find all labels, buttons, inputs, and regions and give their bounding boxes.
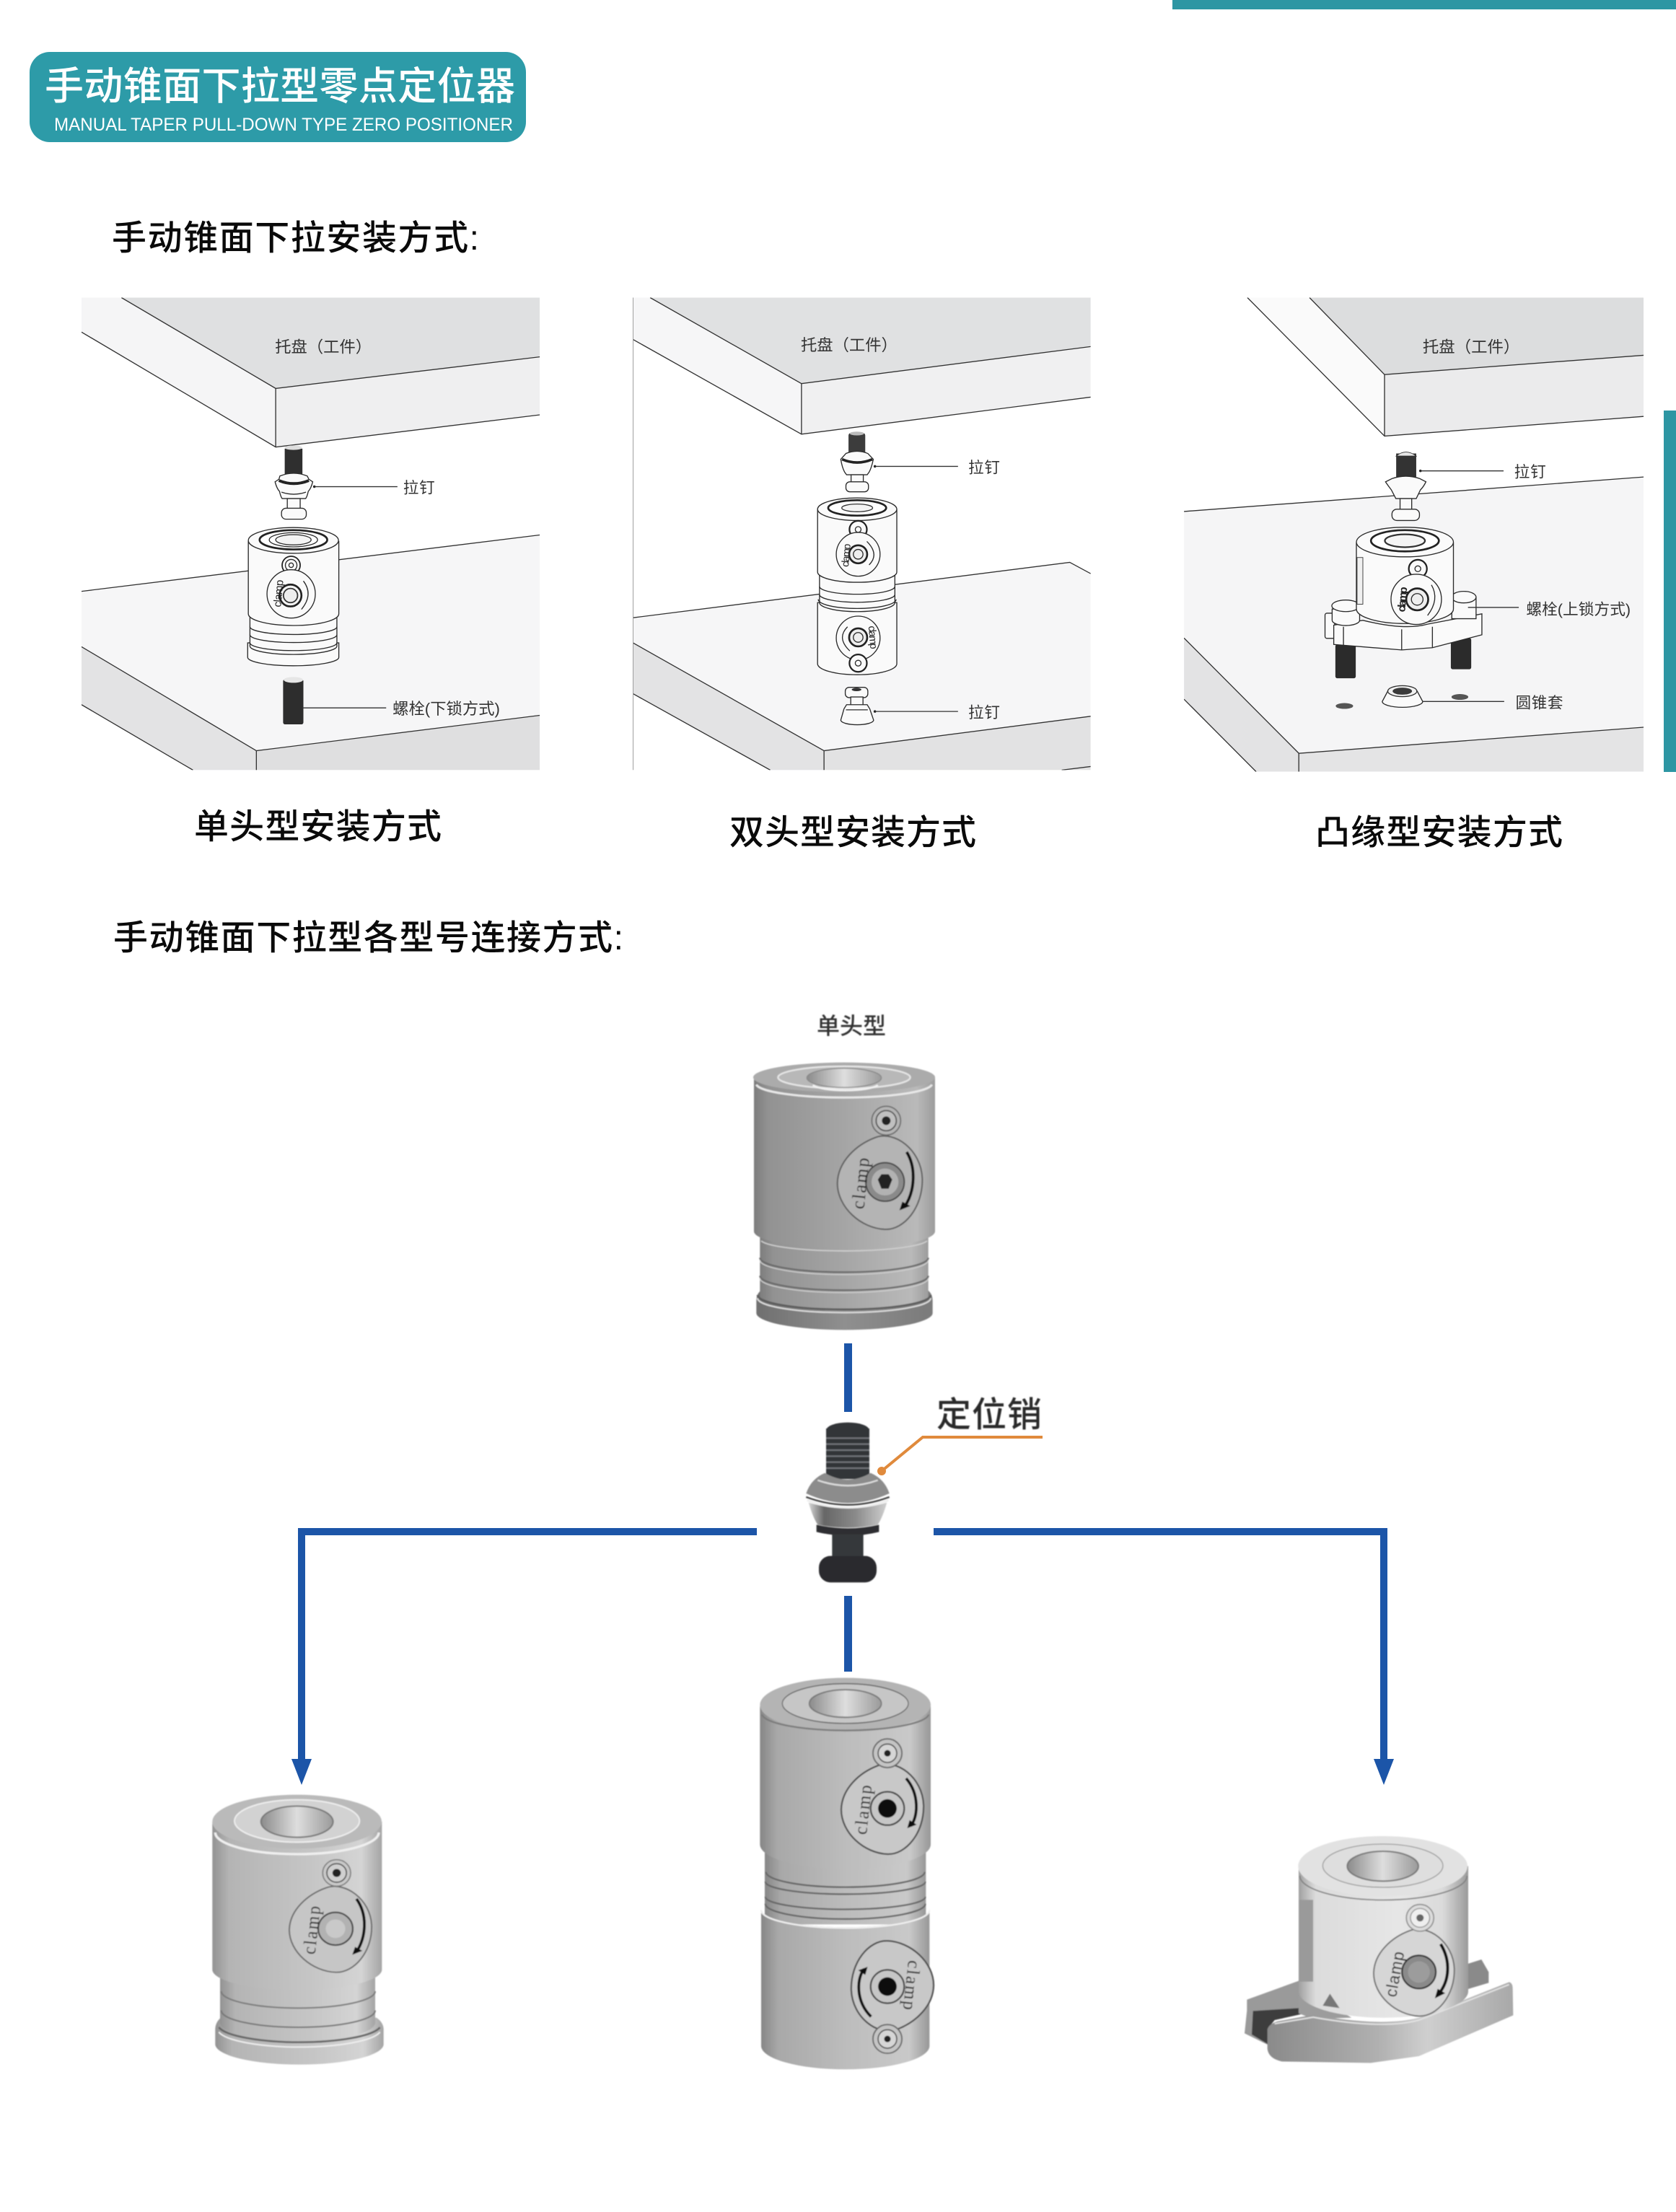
- lower clamp cam: [851, 1941, 934, 2053]
- pallet label: 托盘（工件）: [275, 338, 372, 356]
- lower base slab: [633, 562, 1091, 770]
- bottom pull stud: [841, 688, 874, 725]
- clamp cam: [1374, 1905, 1455, 2016]
- clamp cam: [838, 1106, 922, 1229]
- right edge accent bar: [1664, 411, 1676, 772]
- clamp cam: clamp: [299, 1905, 325, 1955]
- top accent bar: [1172, 0, 1676, 9]
- upper clamp cam: [841, 1739, 923, 1854]
- heading: installation methods: 手动锥面下拉安装方式:: [112, 219, 479, 258]
- taper sleeve: [1382, 685, 1423, 707]
- clamp cam: clamp: [1382, 1950, 1408, 1998]
- connector: blue line from locating pin to double head: [844, 1596, 852, 1672]
- top pull stud: [841, 431, 873, 492]
- photo: flange type positioner: [1245, 1836, 1513, 2063]
- leader: bottom pull stud: [874, 710, 958, 713]
- bolt label: 螺栓(上锁方式): [1526, 601, 1631, 618]
- leader: bolt: [1468, 606, 1519, 608]
- line-art flange positioner: clamp: [1395, 587, 1410, 613]
- upper pallet slab: [1247, 297, 1644, 436]
- caption: flange type: 凸缘型安装方式: [1315, 814, 1563, 852]
- photo: locating pin: [806, 1423, 890, 1582]
- panel: double head installation: [633, 297, 1091, 770]
- photo: single head positioner, left result: [212, 1795, 384, 2065]
- leader: top pull stud: [874, 465, 958, 468]
- pallet label: 托盘（工件）: [1423, 338, 1519, 356]
- leader: bolt: [302, 707, 386, 709]
- lower base slab: [82, 535, 540, 770]
- upper pallet slab: [633, 297, 1091, 434]
- bolt label: 螺栓(下锁方式): [392, 700, 500, 718]
- title chinese: 手动锥面下拉型零点定位器: [45, 65, 515, 108]
- locating pin callout: [877, 1396, 1043, 1475]
- upper pallet slab: [82, 297, 540, 447]
- lower clamp cam: clamp: [899, 1959, 923, 2011]
- bottom pull stud label: 拉钉: [968, 704, 1000, 721]
- line-art double positioner: clamp: [866, 626, 879, 649]
- title badge: [30, 52, 526, 142]
- taper sleeve label: 圆锥套: [1516, 695, 1563, 712]
- panel: single head installation: [82, 297, 540, 770]
- line-art double positioner: [817, 498, 897, 675]
- photo: double head positioner: [760, 1678, 934, 2069]
- pull stud label: 拉钉: [403, 479, 435, 496]
- caption: single head: 单头型安装方式: [194, 808, 442, 846]
- pull stud: [275, 445, 312, 519]
- photo: single head positioner: [753, 1063, 935, 1330]
- arrow: to left positioner: [291, 1532, 757, 1785]
- line-art positioner: [247, 527, 339, 666]
- leader: pull stud: [1419, 470, 1504, 472]
- locating pin label: 定位销: [936, 1396, 1042, 1434]
- pull stud label: 拉钉: [1514, 464, 1546, 481]
- clamp cam: clamp: [847, 1157, 874, 1210]
- line-art positioner: clamp: [271, 579, 286, 607]
- connector: blue line from single head to locating pin: [844, 1343, 852, 1412]
- caption: double head: 双头型安装方式: [729, 814, 976, 852]
- lower base slab: [1184, 477, 1644, 772]
- pull stud: [1385, 452, 1426, 520]
- line-art double positioner: clamp: [840, 543, 854, 567]
- title english: MANUAL TAPER PULL-DOWN TYPE ZERO POSITIONER: [54, 115, 513, 135]
- arrow: to right positioner: [934, 1532, 1394, 1785]
- bolt: [283, 677, 304, 724]
- upper clamp cam: clamp: [851, 1784, 876, 1835]
- clamp cam: [289, 1860, 372, 1972]
- panel: flange type installation: [1184, 297, 1644, 772]
- bolt holes: [1335, 694, 1468, 709]
- top pull stud label: 拉钉: [968, 459, 1000, 476]
- pallet label: 托盘（工件）: [801, 336, 898, 354]
- line-art flange positioner: [1325, 527, 1482, 678]
- leader: pull stud: [313, 486, 398, 488]
- label: single head: 单头型: [817, 1013, 886, 1039]
- heading: connection methods: 手动锥面下拉型各型号连接方式:: [113, 919, 623, 957]
- leader: taper sleeve: [1423, 701, 1504, 703]
